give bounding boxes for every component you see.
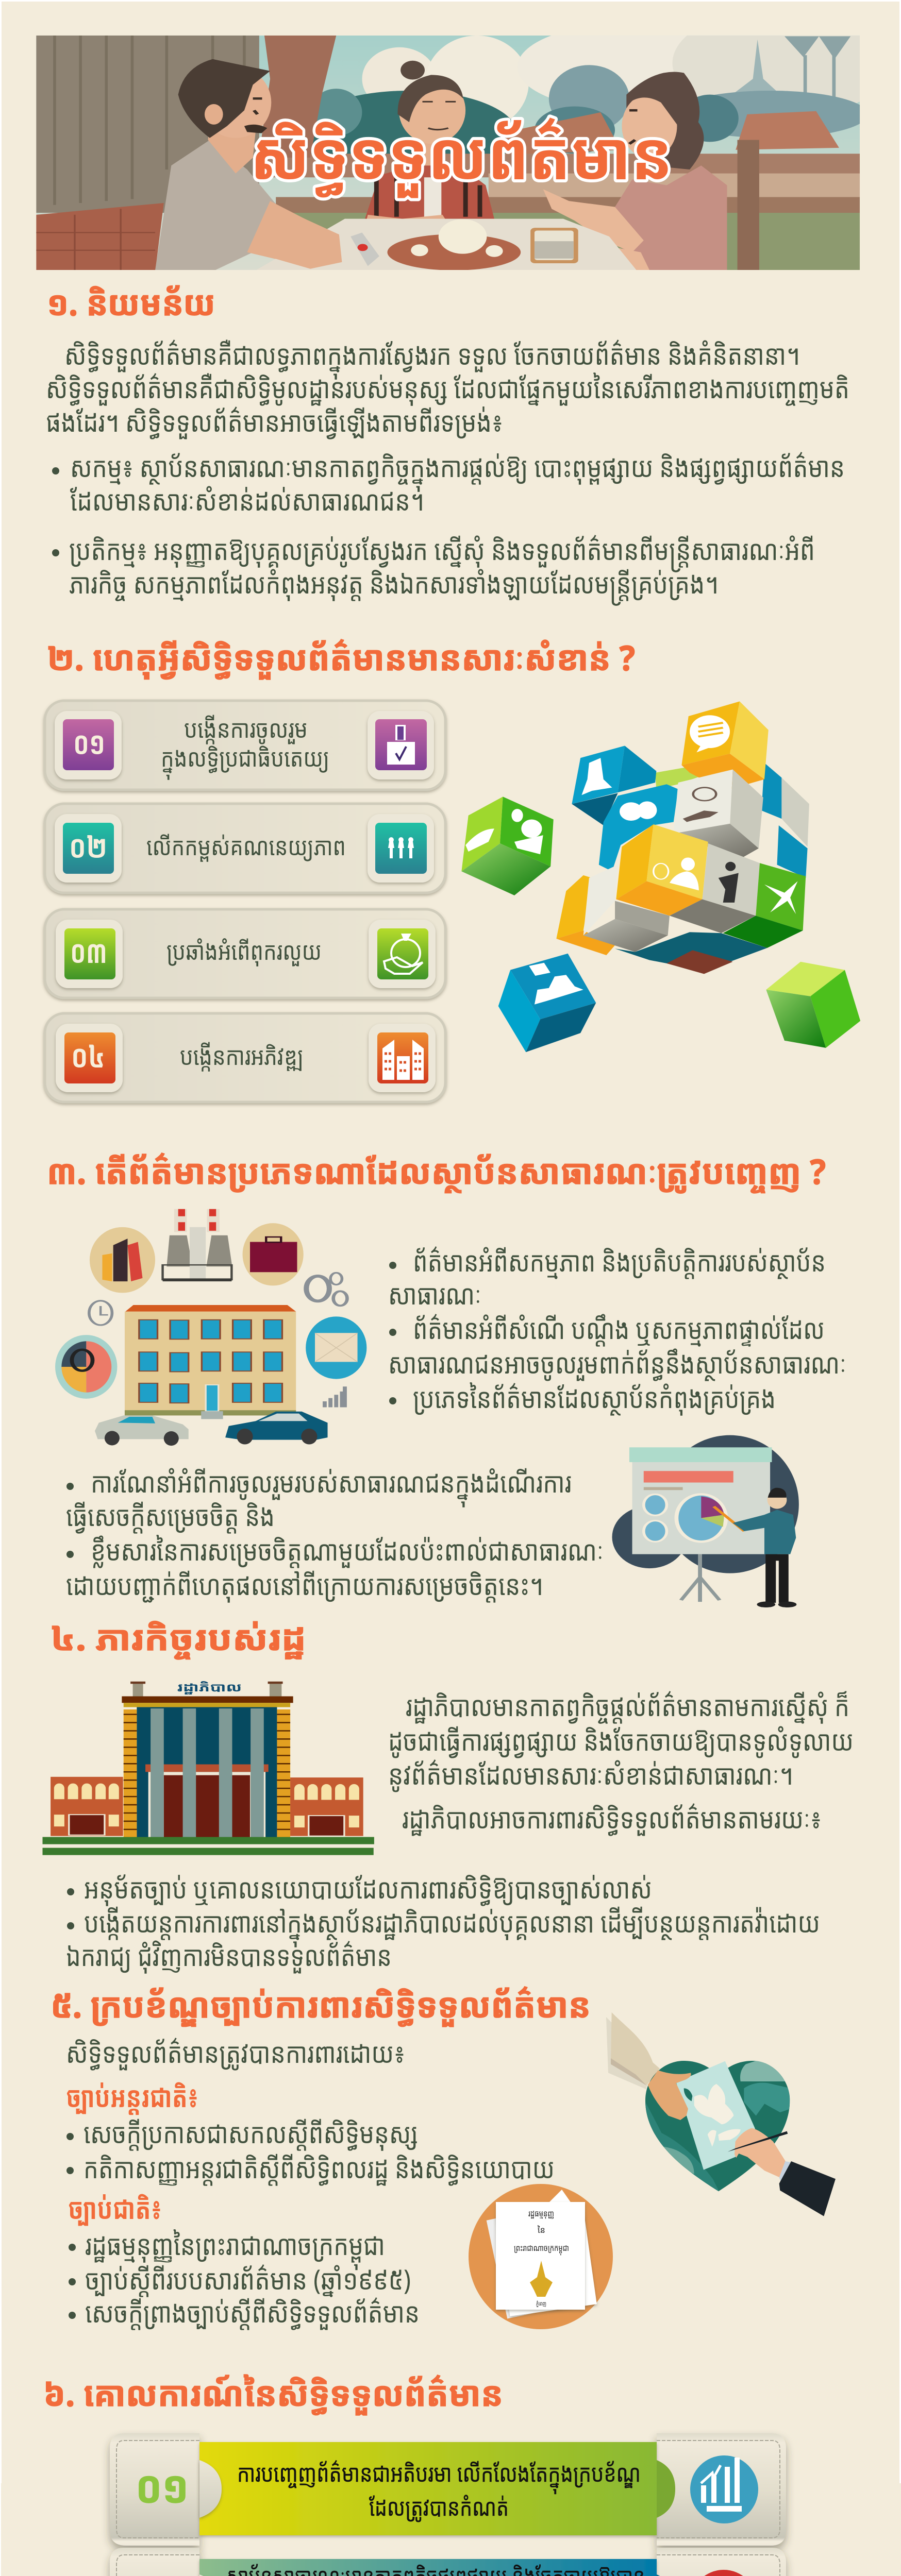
card 02: accountability: [45, 804, 445, 893]
principle 01: maximum disclosure: ដែលត្រូវបានកំណត់: [369, 2491, 509, 2523]
heading: section 4: ៤. ភារកិច្ចរបស់រដ្ឋ: [51, 1614, 306, 1660]
card 01: participation: [45, 701, 445, 790]
bullets: international law: សេចក្តីប្រកាសជាសកលស្តីពីសិទ្ធិមនុស្ស: [84, 2113, 418, 2151]
bullet: reactive: [52, 530, 815, 606]
illustration: presenter with chart board: [612, 1435, 799, 1607]
bullets: government actions: [66, 1869, 820, 1974]
text block: definition: ផងដែរ។ សិទ្ធិទទួលព័ត៌មានអាចធ្វើឡើងតាមពីរទម្រង់៖: [46, 402, 503, 440]
card 03: anti-corruption: ០៣: [70, 929, 107, 973]
principle 01: maximum disclosure: [110, 2433, 786, 2546]
illustration: constitution document: រដ្ឋធម្មនុញ្ញ: [528, 2208, 554, 2219]
illustration: constitution document: នៃ: [538, 2224, 545, 2235]
card 01: participation: ក្នុងលទ្ធិប្រជាធិបតេយ្យ: [161, 741, 329, 780]
bullets: types of information, right column: ព័ត៌មានអំពីសំណើ បណ្តឹង ឬសកម្មភាពផ្ទាល់ដែល: [413, 1309, 825, 1347]
bullets: types of information, lower left: ធ្វើសេចក្តីសម្រេចចិត្ត និង: [66, 1496, 275, 1534]
text block: government duty: [388, 1686, 854, 1837]
text block: definition: [46, 335, 849, 440]
card 04: development: ០៤: [71, 1034, 105, 1077]
illustration: constitution document: [469, 2184, 613, 2329]
bullets: types of information, right column: ប្រភេទនៃព័ត៌មានដែលស្ថាប័នកំពុងគ្រប់គ្រង: [413, 1378, 776, 1416]
bullets: government actions: អនុម័តច្បាប់ ឬគោលនយោបាយដែលការពារសិទ្ធិឱ្យបានច្បាស់លាស់: [84, 1869, 652, 1907]
bullets: types of information, right column: សាធារណៈ: [388, 1275, 481, 1313]
bullets: types of information, right column: ព័ត៌មានអំពីសកម្មភាព និងប្រតិបត្តិការរបស់ស្ថាប័ន: [413, 1242, 826, 1280]
bullet: reactive: ភារកិច្ច សកម្មភាពដែលកំពុងអនុវត្ត និងឯកសារទាំងឡាយដែលមន្ត្រីគ្រប់គ្រង។: [69, 564, 719, 606]
bullets: types of information, lower left: ខ្លឹមសារនៃការសម្រេចចិត្តណាមួយដែលប៉ះពាល់ជាសាធារណៈ: [91, 1531, 604, 1569]
title: សិទ្ធិទទួលព័ត៌មាន: [250, 108, 673, 199]
bullets: types of information, lower left: [66, 1463, 604, 1603]
card 03: anti-corruption: ប្រឆាំងអំពើពុករលួយ: [166, 934, 322, 968]
bullets: government actions: ឯករាជ្យ ជុំវិញការមិនបានទទួលព័ត៌មាន: [66, 1936, 392, 1974]
card 02: accountability: ០២: [69, 824, 107, 868]
heading: section 2: ២. ហេតុអ្វីសិទ្ធិទទួលព័ត៌មានមានសារៈសំខាន់ ?: [47, 634, 635, 681]
card 02: accountability: លើកកម្ពស់គណនេយ្យភាព: [146, 829, 346, 863]
principle 01: maximum disclosure: ការបញ្ចេញព័ត៌មានជាអតិបរមា លើកលែងតែក្នុងក្របខ័ណ្ឌ: [237, 2457, 641, 2494]
hero illustration: three people talking over tea: [36, 35, 860, 270]
subheading: national law: ច្បាប់ជាតិ៖: [68, 2189, 162, 2228]
card 01: participation: បង្កើនការចូលរួម: [184, 712, 308, 745]
bullets: national law: ច្បាប់ស្តីពីរបបសារព័ត៌មាន (ឆ្នាំ១៩៩៥): [85, 2260, 411, 2298]
illustration: constitution document: ព្រះរាជាណាចក្រកម្ពុជា: [514, 2242, 569, 2256]
principle 01: maximum disclosure: ០១: [136, 2454, 189, 2516]
bullets: national law: [69, 2225, 420, 2331]
text block: government duty: នូវព័ត៌មានដែលមានសារៈសំខាន់ជាសាធារណៈ។: [388, 1755, 793, 1793]
illustration: constitution document: ភ្នំពេញ: [536, 2300, 546, 2308]
bullets: types of information, lower left: ការណែនាំអំពីការចូលរួមរបស់សាធារណជនក្នុងដំណើរការ: [91, 1463, 572, 1508]
bullets: international law: [66, 2113, 555, 2187]
heading: section 3: ៣. តើព័ត៌មានប្រភេទណាដែលស្ថាប័នសាធារណៈត្រូវបញ្ចេញ ?: [47, 1148, 826, 1194]
illustration: isometric cubes: [461, 701, 860, 1052]
bullets: types of information, right column: [388, 1242, 846, 1416]
heading: section 5: ៥. ក្របខ័ណ្ឌច្បាប់ការពារសិទ្ធិទទួលព័ត៌មាន: [51, 1981, 591, 2028]
bullet: proactive: ដែលមានសារៈសំខាន់ដល់សាធារណជន។: [70, 481, 424, 519]
heading: section 6: ៦. គោលការណ៍នៃសិទ្ធិទទួលព័ត៌មាន: [43, 2370, 503, 2416]
card 01: participation: ០១: [73, 721, 105, 764]
subheading: international law: ច្បាប់អន្តរជាតិ៖: [66, 2077, 198, 2116]
card 03: anti-corruption: [45, 909, 445, 998]
bullets: international law: កតិកាសញ្ញាអន្តរជាតិស្តីពីសិទ្ធិពលរដ្ឋ និងសិទ្ធិនយោបាយ: [84, 2148, 555, 2187]
text block: government duty: រដ្ឋាភិបាលអាចការពារសិទ្ធិទទួលព័ត៌មានតាមរយៈ៖: [402, 1799, 822, 1837]
illustration: government building: [43, 1679, 374, 1855]
bullets: national law: សេចក្តីព្រាងច្បាប់ស្តីពីសិទ្ធិទទួលព័ត៌មាន: [85, 2293, 420, 2331]
text block: legal framework intro: សិទ្ធិទទួលព័ត៌មានត្រូវបានការពារដោយ៖: [66, 2033, 405, 2071]
bullets: types of information, lower left: ដោយបញ្ជាក់ពីហេតុផលនៅពីក្រោយការសម្រេចចិត្តនេះ។: [66, 1565, 543, 1603]
principle 02: duty to publish: [110, 2548, 786, 2576]
card 04: development: បង្កើនការអភិវឌ្ឍ: [180, 1039, 304, 1073]
illustration: public institution building: [55, 1209, 366, 1446]
illustration: heart, peace letter and hands: [606, 2012, 836, 2216]
heading: section 1: ១. និយមន័យ: [47, 279, 215, 326]
card 04: development: [45, 1013, 445, 1102]
bullet: proactive: [52, 447, 845, 519]
illustration: government building: រដ្ឋាភិបាល: [177, 1679, 242, 1695]
bullets: national law: រដ្ឋធម្មនុញ្ញនៃព្រះរាជាណាចក្រកម្ពុជា: [85, 2225, 385, 2270]
